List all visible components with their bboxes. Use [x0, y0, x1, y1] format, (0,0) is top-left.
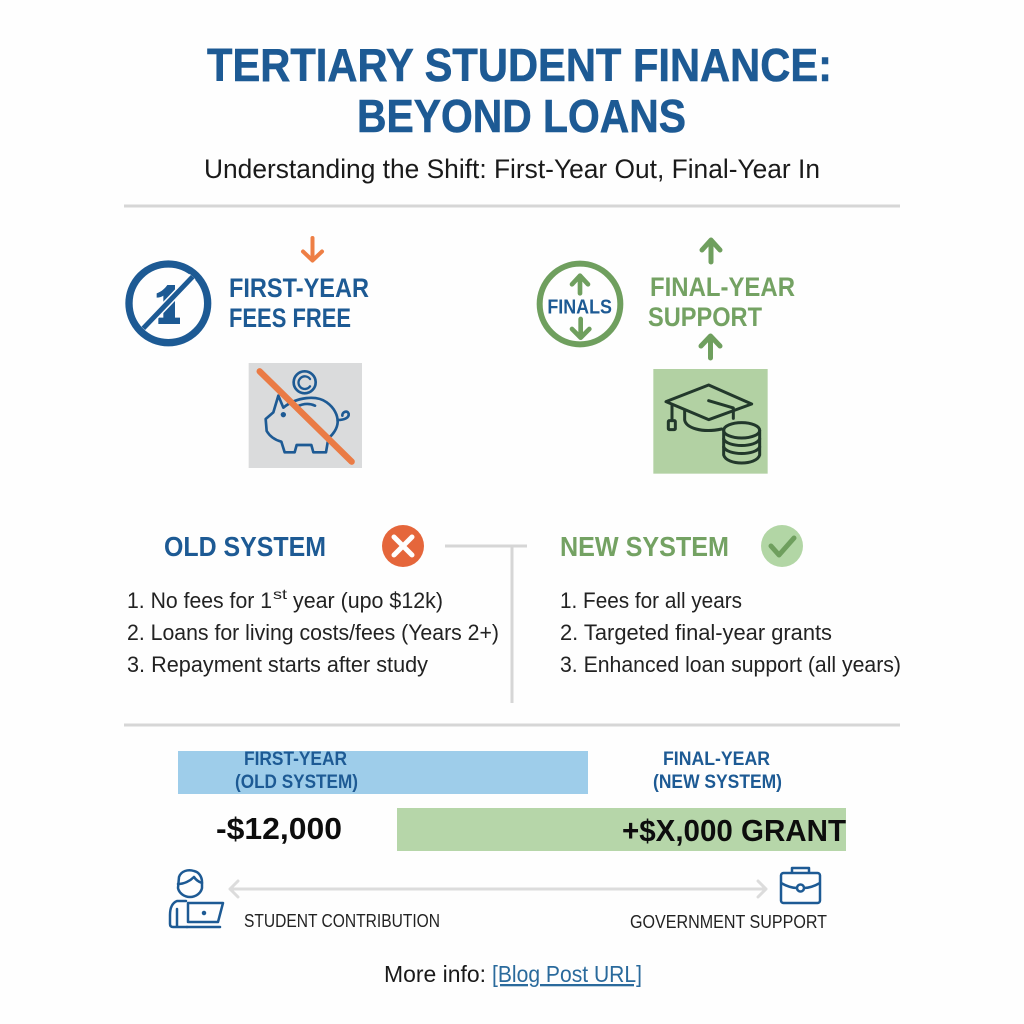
panel: contribution scale: [170, 868, 827, 932]
list: new system points: 1. Fees for all years: [560, 588, 742, 613]
icon: orange down arrow: [303, 238, 322, 260]
icon: graduation cap and coins: [653, 369, 768, 474]
bar: final-year grant: [397, 808, 846, 851]
label: first-year old system: [235, 749, 358, 793]
list: old system points: 1. No fees for 1: [127, 588, 272, 613]
label: final-year new system: FINAL-YEAR: [663, 749, 770, 770]
list: old system points: year (upo $12k): [293, 588, 443, 613]
icon: green check: [761, 525, 803, 567]
list: new system points: [560, 588, 901, 677]
icon: green up arrow top: [702, 240, 720, 262]
panel: final-year support: [540, 240, 795, 474]
heading: final-year support: FINAL-YEAR: [650, 272, 795, 302]
list: old system points: 3. Repayment starts after study: [127, 652, 428, 677]
subtitle: Understanding the Shift: First-Year Out, Final-Year In: [204, 154, 820, 184]
panel: new system: [560, 525, 901, 677]
value: plus grant: +$X,000 GRANT: [622, 813, 846, 848]
icon: piggy bank crossed out: [249, 363, 362, 468]
icon: finals circle: [540, 264, 620, 344]
title: TERTIARY STUDENT FINANCE:: [207, 39, 832, 91]
panel: old system: [127, 525, 499, 677]
footer: more info link: More info:: [384, 961, 486, 987]
icon: finals circle: FINALS: [547, 297, 612, 319]
heading: old system: OLD SYSTEM: [164, 531, 326, 562]
heading: first-year fees free: FIRST-YEAR: [229, 273, 369, 303]
title: [207, 39, 832, 142]
label: first-year old system: (OLD SYSTEM): [235, 772, 358, 793]
panel: first-year fees free: [129, 238, 369, 468]
label: first-year old system: FIRST-YEAR: [244, 749, 347, 770]
label: student contribution: STUDENT CONTRIBUTION: [244, 911, 440, 931]
label: government support: GOVERNMENT SUPPORT: [630, 912, 827, 932]
title: BEYOND LOANS: [357, 90, 686, 142]
value: minus 12000: -$12,000: [216, 811, 342, 846]
icon: briefcase: [781, 868, 820, 903]
list: old system points: [127, 586, 499, 677]
list: old system points: 2. Loans for living costs/fees (Years 2+): [127, 620, 499, 645]
heading: final-year support: [648, 272, 795, 332]
panel: comparison bars: [178, 749, 846, 851]
heading: final-year support: SUPPORT: [648, 302, 762, 332]
icon: student with laptop: [170, 870, 223, 927]
list: old system points: st: [273, 586, 287, 602]
label: final-year new system: (NEW SYSTEM): [653, 772, 782, 793]
heading: first-year fees free: FEES FREE: [229, 303, 351, 333]
heading: new system: NEW SYSTEM: [560, 531, 729, 562]
icon: red cross: [382, 525, 424, 567]
list: new system points: 3. Enhanced loan support (all years): [560, 652, 901, 677]
icon: green up arrow bottom: [701, 336, 720, 358]
footer: more info link: [Blog Post URL]: [492, 961, 642, 987]
bar: first-year old system: [178, 751, 588, 794]
label: final-year new system: [653, 749, 782, 793]
arrow: double-headed scale: [230, 881, 766, 897]
footer: more info link: [384, 961, 642, 987]
icon: crossed-out number one: [129, 264, 208, 343]
heading: first-year fees free: [229, 273, 369, 333]
list: new system points: 2. Targeted final-year grants: [560, 620, 832, 645]
